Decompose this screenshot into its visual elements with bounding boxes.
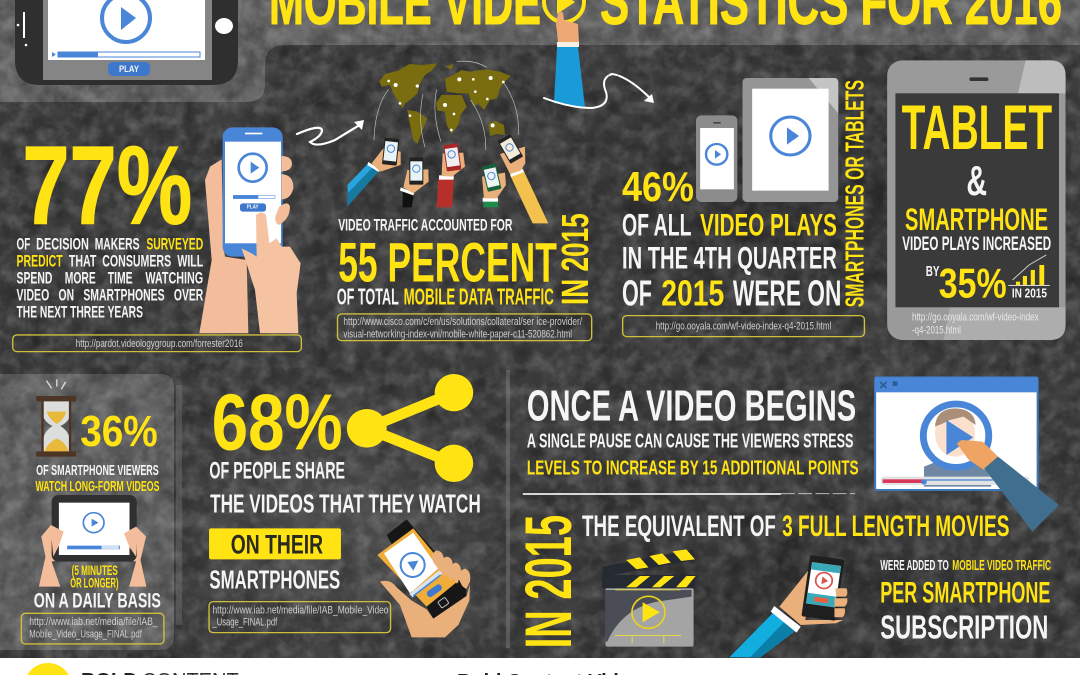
justified paragraph: ON	[59, 285, 74, 304]
statistic: 55 percent of mobile data traffic: VIDEO TRAFFIC ACCOUNTED FOR	[338, 215, 513, 235]
world map	[379, 63, 511, 144]
hand: red sleeve	[437, 143, 465, 207]
hand: black sleeve	[400, 157, 429, 207]
statistic: 46 percent: VIDEO PLAYS	[700, 207, 837, 243]
justified paragraph: VIDEO	[17, 285, 49, 304]
source link: visual-networking-index-vni/mobile-white-paper-c11-520862.html	[343, 328, 572, 340]
source link: http://www.cisco.com/c/en/us/solutions/collateral/ser ice-provider/	[343, 316, 583, 328]
arrow: swoosh to the map	[297, 120, 364, 145]
hand: yellow sleeve	[497, 134, 548, 223]
justified paragraph: CONSUMERS	[102, 251, 171, 270]
justified paragraph: MORE	[65, 268, 96, 287]
statistic: pause stress	[523, 377, 1059, 532]
source link	[209, 602, 391, 633]
source link	[338, 314, 592, 341]
justified paragraph: SMARTPHONES	[83, 285, 165, 304]
panel: tablet with 35 percent statistic: IN 2015	[1012, 286, 1047, 300]
justified paragraph	[17, 234, 204, 321]
statistic: 55 percent of mobile data traffic	[337, 213, 596, 341]
icon: video window with pointing hand	[875, 377, 1059, 532]
source link: http://www.iab.net/media/file/IAB_Mobile_Video	[212, 604, 388, 616]
source link	[21, 613, 164, 644]
statistic: 36 percent long-form: ON A DAILY BASIS	[34, 588, 161, 612]
icon: pressing hand and play circle	[544, 0, 585, 108]
panel: tablet with 35 percent statistic: &	[966, 158, 987, 204]
statistic: 36 percent long-form: OR LONGER)	[70, 576, 119, 592]
icon: share	[347, 374, 473, 482]
justified paragraph: OF	[17, 234, 30, 253]
statistic: 46 percent	[622, 78, 870, 337]
source link: Mobile_Video_Usage_FINAL.pdf	[29, 628, 143, 640]
justified paragraph: DECISION	[36, 234, 89, 253]
justified paragraph: SPEND	[17, 268, 52, 287]
source link: -q4-2015.html	[912, 324, 961, 336]
footer	[0, 658, 1080, 675]
icon: hand holding tilted phone	[377, 519, 470, 637]
statistic: 3 full length movies: IN 2015	[512, 515, 585, 648]
statistic: pause stress: A SINGLE PAUSE CAN CAUSE THE VIEWERS STRESS	[527, 430, 853, 452]
hand: green sleeve	[482, 163, 506, 207]
statistic: 68 percent share: SMARTPHONES	[209, 565, 340, 594]
number: 77%	[22, 123, 192, 247]
justified paragraph: SURVEYED	[146, 234, 203, 253]
justified paragraph: THE NEXT THREE YEARS	[17, 302, 143, 321]
connection arcs	[374, 61, 518, 150]
statistic: 68 percent share: OF PEOPLE SHARE	[209, 458, 345, 484]
panel: long-form video card	[0, 374, 174, 650]
hand: blue sleeve	[347, 138, 401, 207]
statistic: 36 percent long-form: WATCH LONG-FORM VIDEOS	[35, 479, 159, 495]
statistic: 55 percent of mobile data traffic: MOBILE DATA TRAFFIC	[404, 285, 554, 310]
statistic: 46 percent: WERE ON	[733, 273, 841, 313]
statistic: 68 percent share	[209, 374, 481, 633]
statistic: 46 percent: OF ALL	[622, 207, 692, 243]
justified paragraph: OVER	[174, 285, 204, 304]
icon: hourglass	[36, 379, 76, 457]
illustration: world map with hands holding phones	[347, 61, 548, 223]
statistic: 36 percent long-form: OF SMARTPHONE VIEWERS	[36, 463, 159, 479]
title	[269, 0, 1062, 38]
justified paragraph: THAT	[69, 251, 97, 270]
statistic: 46 percent: OF	[622, 273, 652, 313]
arrow: swoosh to the right	[544, 74, 654, 108]
icon: hand holding phone	[729, 555, 847, 657]
statistic: 68 percent share: 68%	[212, 378, 343, 467]
mini bar chart	[1008, 255, 1050, 286]
panel: tablet with 35 percent statistic	[887, 60, 1066, 340]
statistic: 77 percent	[13, 123, 301, 352]
justified paragraph: PREDICT	[17, 251, 63, 270]
statistic: 46 percent: 46%	[622, 164, 694, 210]
icon: tablet	[743, 78, 838, 202]
statistic: pause stress: ONCE A VIDEO BEGINS	[527, 382, 856, 430]
icon: clapperboard	[602, 549, 696, 647]
source link	[912, 312, 1039, 336]
justified paragraph: WILL	[177, 251, 203, 270]
source link: _Usage_FINAL.pdf	[212, 617, 278, 629]
highlighted label: ON THEIR	[231, 529, 323, 559]
statistic: 55 percent of mobile data traffic: 55 PERCENT	[338, 231, 557, 293]
statistic: 3 full length movies	[512, 509, 1051, 657]
source link: http://go.ooyala.com/wf-video-index	[912, 312, 1039, 324]
icon: hands holding smartphone	[199, 127, 301, 333]
icon: tablet held in two hands	[39, 495, 146, 587]
icon: landscape phone with player	[15, 0, 238, 85]
source link	[13, 335, 301, 352]
statistic: 3 full length movies: WERE ADDED TO	[880, 558, 949, 574]
statistic: 46 percent: IN THE 4TH QUARTER	[622, 240, 837, 276]
source link: http://pardot.videologygroup.com/forrester2016	[76, 338, 243, 350]
statistic: 55 percent of mobile data traffic: OF TOTAL	[337, 285, 399, 310]
statistic: 36 percent long-form: 36%	[80, 408, 158, 456]
icon: landscape phone with player: PLAY	[119, 64, 139, 74]
statistic: 55 percent of mobile data traffic: IN 2015	[555, 213, 596, 305]
panel: tablet with 35 percent statistic: BY	[926, 264, 940, 280]
justified paragraph: WATCHING	[145, 268, 203, 287]
statistic: 36 percent long-form	[21, 379, 164, 644]
justified paragraph: MAKERS	[95, 234, 139, 253]
statistic: 68 percent share: THE VIDEOS THAT THEY WATCH	[210, 489, 481, 519]
justified paragraph: TIME	[108, 268, 133, 287]
source link: http://www.iab.net/media/file/IAB_	[29, 616, 159, 628]
statistic: 46 percent: 2015	[661, 273, 724, 313]
source link	[623, 316, 864, 337]
panel: tablet with 35 percent statistic: 35%	[939, 260, 1007, 306]
icon: small phone	[696, 115, 737, 202]
statistic: pause stress: LEVELS TO INCREASE BY 15 ADDITIONAL POINTS	[527, 457, 859, 479]
source link: http://go.ooyala.com/wf-video-index-q4-2015.html	[656, 320, 831, 332]
statistic: 3 full length movies: THE EQUIVALENT OF	[582, 509, 776, 543]
icon: hands holding smartphone: PLAY	[247, 205, 259, 211]
statistic: 36 percent long-form: (5 MINUTES	[72, 563, 118, 579]
